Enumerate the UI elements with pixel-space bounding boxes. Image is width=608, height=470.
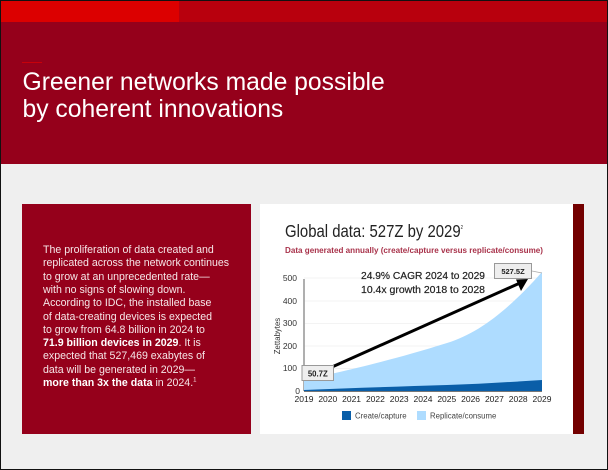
chart subtitle: Data generated annually (create/capture versus replicate/consume) xyxy=(285,245,543,255)
y axis: 200 xyxy=(283,341,297,351)
callout: 50.7Z xyxy=(302,366,334,380)
x axis: 2025 xyxy=(437,394,457,404)
y axis: 100 xyxy=(283,363,297,373)
title accent rule xyxy=(22,62,42,63)
x axis: 2021 xyxy=(342,394,361,404)
y axis: 300 xyxy=(283,318,297,328)
intro paragraph: replicated across the network continues xyxy=(43,257,229,269)
growth arrow xyxy=(332,279,528,367)
x axis: 2028 xyxy=(509,394,528,404)
callout: CAGR text xyxy=(361,270,485,296)
top stripe: bright red xyxy=(1,1,179,22)
panel: chart card xyxy=(260,204,573,434)
intro paragraph: with no signs of slowing down. xyxy=(43,284,186,296)
y axis xyxy=(273,273,542,396)
x axis: 2024 xyxy=(414,394,433,404)
x axis: 2026 xyxy=(461,394,480,404)
title xyxy=(22,69,385,122)
y axis: 500 xyxy=(283,273,297,283)
callout: 50.7Z: 50.7Z xyxy=(308,370,328,378)
y axis: 400 xyxy=(283,296,297,306)
area: replicate/consume xyxy=(304,272,542,391)
intro paragraph: to grow from 64.8 billion in 2024 to xyxy=(43,324,205,336)
intro paragraph: According to IDC, the installed base xyxy=(43,297,211,309)
panel accent bar xyxy=(573,204,584,434)
top stripe: dark red xyxy=(1,1,607,22)
intro paragraph: of data-creating devices is expected xyxy=(43,310,212,322)
title: by coherent innovations xyxy=(22,96,283,122)
legend xyxy=(342,411,496,420)
intro paragraph: data will be generated in 2029— xyxy=(43,364,195,376)
intro paragraph: 71.9 billion devices in 2029. It is xyxy=(43,337,201,349)
intro paragraph: to grow at an unprecedented rate— xyxy=(43,271,210,283)
x axis: 2029 xyxy=(533,394,552,404)
x axis: 2027 xyxy=(485,394,504,404)
legend: Replicate/consume xyxy=(430,412,496,420)
y axis title: Zettabytes xyxy=(273,318,282,354)
callout: CAGR text: 10.4x growth 2018 to 2028 xyxy=(361,284,485,296)
y axis: 0 xyxy=(295,386,300,396)
intro paragraph: more than 3x the data in 2024.1 xyxy=(43,377,196,389)
chart title: Global data: 527Z by 2029 xyxy=(285,221,491,241)
x axis: 2023 xyxy=(390,394,409,404)
panel: intro text xyxy=(22,204,251,434)
intro paragraph xyxy=(43,244,229,389)
x axis: 2019 xyxy=(295,394,314,404)
chart title: 2 xyxy=(461,225,463,231)
area: create/capture xyxy=(304,380,542,391)
legend: Create/capture xyxy=(355,412,407,420)
callout: CAGR text: 24.9% CAGR 2024 to 2029 xyxy=(361,270,485,282)
callout: 527.5Z xyxy=(494,264,542,278)
title: Greener networks made possible xyxy=(22,69,385,96)
intro paragraph: The proliferation of data created and xyxy=(43,244,214,256)
intro paragraph: expected that 527,469 exabytes of xyxy=(43,350,205,362)
x axis: 2020 xyxy=(318,394,338,404)
x axis xyxy=(295,392,552,404)
x axis: 2022 xyxy=(366,394,385,404)
callout: 527.5Z: 527.5Z xyxy=(501,267,525,276)
header band xyxy=(1,1,607,164)
